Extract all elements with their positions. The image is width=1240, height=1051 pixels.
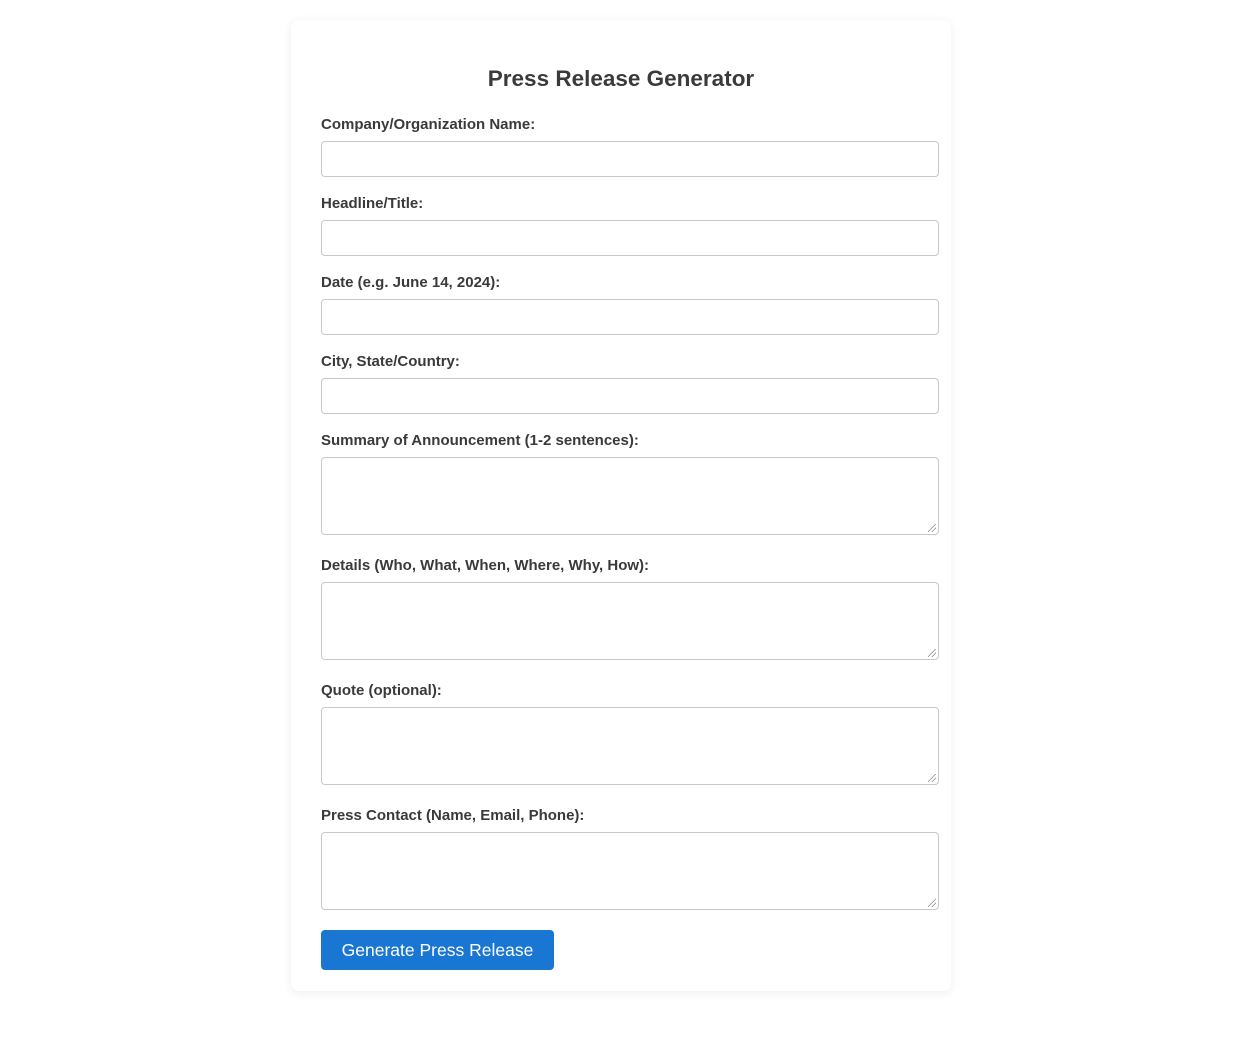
field: press contact [321,807,939,910]
field: press contact: Press Contact (Name, Email, Phone): [321,807,584,824]
field: summary: Summary of Announcement (1-2 sentences): [321,432,639,449]
field: company name [321,116,939,177]
button: generate [321,930,554,970]
field: company name: Company/Organization Name: [321,116,535,133]
field: details [321,557,939,660]
title: Press Release Generator [488,66,754,91]
field: details: Details (Who, What, When, Where, Why, How): [321,557,649,574]
field: city [321,353,939,414]
field: quote [321,682,939,785]
field: summary [321,432,939,535]
field: date: Date (e.g. June 14, 2024): [321,274,500,291]
field: quote: Quote (optional): [321,682,442,699]
panel: form card [291,20,951,991]
button: generate: Generate Press Release [342,940,533,960]
field: date [321,274,939,335]
field: city: City, State/Country: [321,353,460,370]
field: headline: Headline/Title: [321,195,423,212]
field: headline [321,195,939,256]
